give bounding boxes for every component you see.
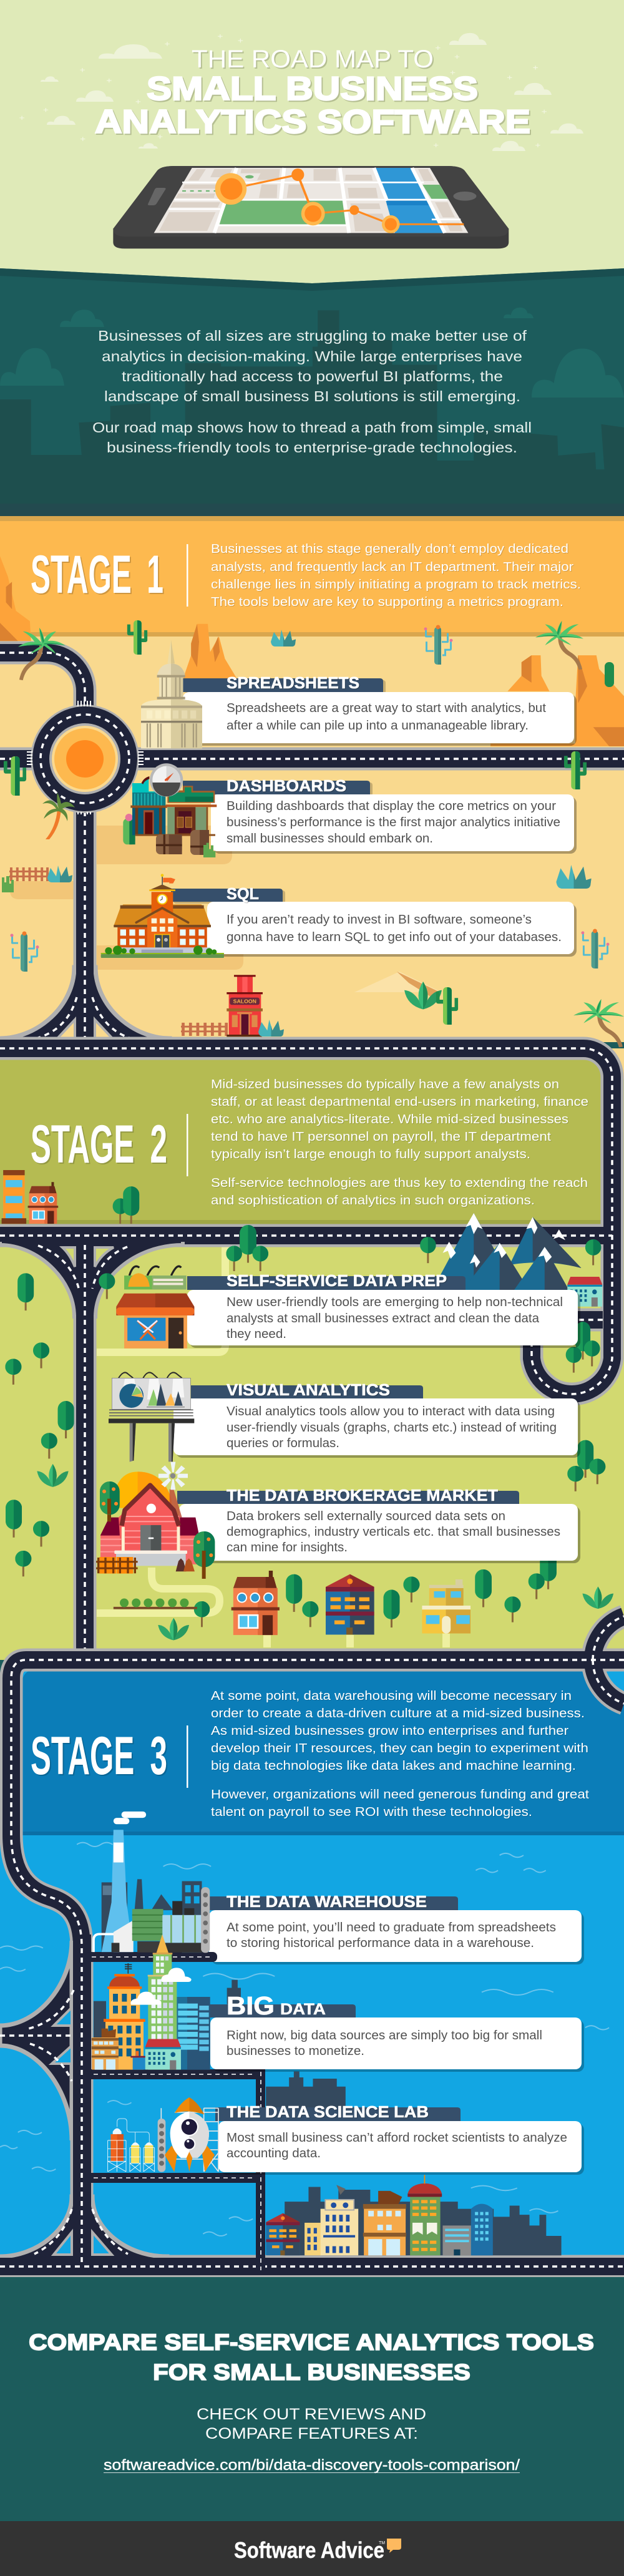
text: stage 1 heading: STAGE 1 [31, 545, 163, 605]
roundabout [27, 701, 144, 814]
intro text [92, 328, 532, 456]
card: data warehouse: At some point, you’ll need to graduate from spreadsheets [227, 1921, 556, 1934]
text: stage 3 description [211, 1689, 589, 1819]
card: data brokerage market [177, 1486, 580, 1563]
mountains [432, 1213, 581, 1290]
intro text: analytics in decision-making. While large enterprises have [102, 348, 522, 364]
card: self-service data prep [187, 1271, 580, 1348]
intro text: landscape of small business BI solutions is still emerging. [104, 388, 520, 404]
text: stage 1 description: Businesses at this stage generally don’t employ dedicated [211, 542, 568, 556]
icon: rocket and lab [108, 2097, 218, 2172]
hero clouds [41, 33, 583, 151]
icon: cafe [116, 1266, 194, 1349]
card: big data: businesses to monetize. [227, 2044, 364, 2058]
road: stage 3 [0, 1616, 624, 2275]
text: stage 2 heading: STAGE 2 [31, 1115, 167, 1174]
heading: compare tools: FOR SMALL BUSINESSES [153, 2360, 470, 2384]
icon: saloon agave [258, 1020, 284, 1037]
text: stage 1 description: analysts, and frequently lack an IT department. Their major [211, 560, 573, 574]
card: spreadsheets: Spreadsheets are a great way to start with analytics, but [227, 701, 546, 715]
card: data warehouse [209, 1892, 584, 1964]
text: stage 2 description: Mid-sized businesses do typically have a few analysts on [211, 1078, 559, 1091]
icon: billboard [109, 1372, 194, 1462]
card: sql: SQL [227, 884, 259, 903]
text: stage 1 description [211, 542, 581, 609]
text: stage 2 description: and sophistication of analytics in such organizations. [211, 1194, 535, 1208]
hero panel [0, 0, 624, 293]
card: data brokerage market: demographics, industry verticals etc. that small businesses [227, 1525, 560, 1539]
text: stage 2 description: staff, or at least departmental end-users in marketing, finance [211, 1095, 588, 1109]
orange apartment [2, 1170, 26, 1224]
card: self-service data prep: SELF-SERVICE DATA PREP [227, 1271, 447, 1290]
road junction to stage 2 road [0, 967, 170, 1058]
text: stage 3 description: order to create a data-driven culture at a mid-sized business. [211, 1707, 585, 1720]
heading: compare tools: COMPARE SELF-SERVICE ANALYTICS TOOLS [29, 2330, 594, 2354]
card: data brokerage market: can mine for insights. [227, 1541, 348, 1554]
heading: compare tools [29, 2330, 594, 2384]
card: dashboards [183, 776, 577, 854]
icon: big data city [92, 1934, 210, 2070]
card: dashboards: business’s performance is the first major analytics initiative [227, 816, 560, 829]
icon: school building [101, 874, 224, 958]
icon: barn with windmill [96, 1462, 215, 1579]
panel: footer call to action [0, 2275, 624, 2521]
text: stage 2 description: typically isn’t large enough to fully support analysts. [211, 1148, 530, 1161]
text: stage 2 description [211, 1078, 588, 1208]
text: check out reviews: COMPARE FEATURES AT: [205, 2425, 418, 2442]
card: visual analytics [173, 1380, 580, 1458]
logo: software advice: TM [379, 2541, 385, 2545]
icon: phone with route map [113, 166, 509, 248]
card: data science lab: THE DATA SCIENCE LAB [227, 2102, 429, 2121]
icon: bottom city row [266, 2175, 493, 2255]
text: stage 2 description: etc. who are analytics-literate. While mid-sized businesses [211, 1113, 568, 1126]
icon: capitol building [141, 640, 202, 748]
sand patches [10, 826, 243, 970]
card: data science lab [215, 2102, 584, 2175]
garden paths [97, 1247, 446, 1647]
stage 2 village [114, 1569, 545, 1635]
icon: factory [94, 1812, 210, 1953]
card: self-service data prep: they need. [227, 1327, 286, 1341]
text: stage 3 heading: STAGE 3 [31, 1726, 167, 1786]
skyline behind stage 3 cards [227, 1980, 562, 2255]
right trees [158, 1277, 613, 1641]
card: sql [171, 884, 577, 957]
water ripples [0, 1843, 609, 2236]
hero sparkles [19, 34, 547, 147]
text: stage 3 description: talent on payroll to see ROI with these technologies. [211, 1805, 532, 1819]
icon: saloon building: SALOON [233, 999, 256, 1005]
card: spreadsheets: after a while can pile up into a unmanageable library. [227, 719, 529, 733]
text: stage 3 description: As mid-sized businesses grow into enterprises and further [211, 1724, 568, 1738]
stage 2 scenery [2, 1170, 613, 1641]
intro clouds [0, 308, 624, 398]
stage 1 desert plants [2, 620, 624, 1047]
card: visual analytics: VISUAL ANALYTICS [227, 1380, 390, 1399]
text: stage 3 description: However, organizations will need generous funding and great [211, 1788, 589, 1802]
card: dashboards: small businesses should embark on. [227, 832, 433, 846]
icon: dashboards saloon with gauge [123, 763, 217, 857]
card: big data: DATA [280, 2001, 326, 2018]
text: check out reviews: CHECK OUT REVIEWS AND [197, 2406, 426, 2423]
intro text: Businesses of all sizes are struggling to make better use of [98, 328, 527, 344]
road: stage 1 [0, 653, 624, 1058]
title [95, 46, 530, 140]
title: SMALL BUSINESS [147, 71, 478, 107]
logo: software advice: Software Advice [234, 2537, 384, 2563]
left trees [5, 1273, 115, 1576]
text: stage 3 description: develop their IT resources, they can begin to experiment with [211, 1742, 588, 1755]
icon: saloon building [227, 975, 263, 1037]
title: THE ROAD MAP TO [192, 46, 434, 73]
card: data brokerage market: Data brokers sell externally sourced data sets on [227, 1510, 505, 1523]
intro panel [0, 268, 624, 518]
card: data science lab: accounting data. [227, 2147, 321, 2160]
card: visual analytics: queries or formulas. [227, 1437, 339, 1450]
card: visual analytics: Visual analytics tools allow you to interact with data using [227, 1405, 555, 1418]
card: self-service data prep: analysts at small businesses extract and clean the data [227, 1312, 540, 1325]
text: stage 3 description: At some point, data warehousing will become necessary in [211, 1689, 572, 1703]
card: big data [209, 1991, 584, 2072]
card: data science lab: Most small business can’t afford rocket scientists to analyze [227, 2131, 567, 2145]
card: spreadsheets [183, 673, 577, 746]
vegetable row [114, 1598, 197, 1609]
text: stage 2 description: tend to have IT personnel on payroll, the IT department [211, 1130, 551, 1144]
card: self-service data prep: New user-friendly tools are emerging to help non-technical [227, 1295, 563, 1309]
panel: stage 1 desert [0, 516, 624, 2576]
road: water junction [0, 1941, 72, 2140]
intro skyline [0, 310, 624, 517]
intro text: business-friendly tools to enterprise-grade technologies. [107, 439, 517, 456]
text: stage 1 description: The tools below are key to supporting a metrics program. [211, 595, 563, 609]
intro text: Our road map shows how to thread a path from simple, small [92, 419, 532, 436]
text: stage 2 description: Self-service technologies are thus key to extending the reach [211, 1176, 588, 1190]
cactus with flower [123, 814, 135, 844]
text: stage 1 description: challenge lies in simply initiating a program to track metrics. [211, 578, 581, 592]
orange trees [100, 1481, 215, 1579]
card: dashboards: Building dashboards that display the core metrics on your [227, 799, 556, 813]
road: stage 2 [0, 1048, 612, 1654]
text: check out reviews [197, 2406, 426, 2442]
card: visual analytics: user-friendly visuals (graphs, charts etc.) instead of writing [227, 1421, 557, 1435]
intro text: traditionally had access to powerful BI platforms, the [122, 368, 503, 384]
card: data warehouse: to storing historical performance data in a warehouse. [227, 1936, 534, 1950]
text: url: softwareadvice.com/bi/data-discovery-tools-comparison/ [104, 2457, 520, 2474]
text: stage 3 description: big data technologies like data lakes and machine learning. [211, 1759, 576, 1773]
lower overpasses behind stage 3 cards [90, 2069, 265, 2270]
card: spreadsheets: SPREADSHEETS [227, 673, 359, 692]
card: sql: If you aren’t ready to invest in BI software, someone’s [227, 913, 532, 927]
panel: footer logo bar [0, 2521, 624, 2576]
card: sql: gonna have to learn SQL to get info out of your databases. [227, 930, 562, 944]
card: data brokerage market: THE DATA BROKERAGE MARKET [227, 1486, 498, 1505]
panel: stage 2 hills [0, 1048, 624, 1660]
title: ANALYTICS SOFTWARE [95, 104, 530, 140]
top overpass under factory [85, 1952, 217, 1962]
card: big data: Right now, big data sources are simply too big for small [227, 2029, 542, 2042]
card: data warehouse: THE DATA WAREHOUSE [227, 1892, 427, 1911]
card: big data: BIG [227, 1991, 275, 2020]
card: dashboards: DASHBOARDS [227, 776, 346, 795]
desert mesas [0, 556, 624, 746]
panel: stage 3 water [0, 1660, 624, 2271]
